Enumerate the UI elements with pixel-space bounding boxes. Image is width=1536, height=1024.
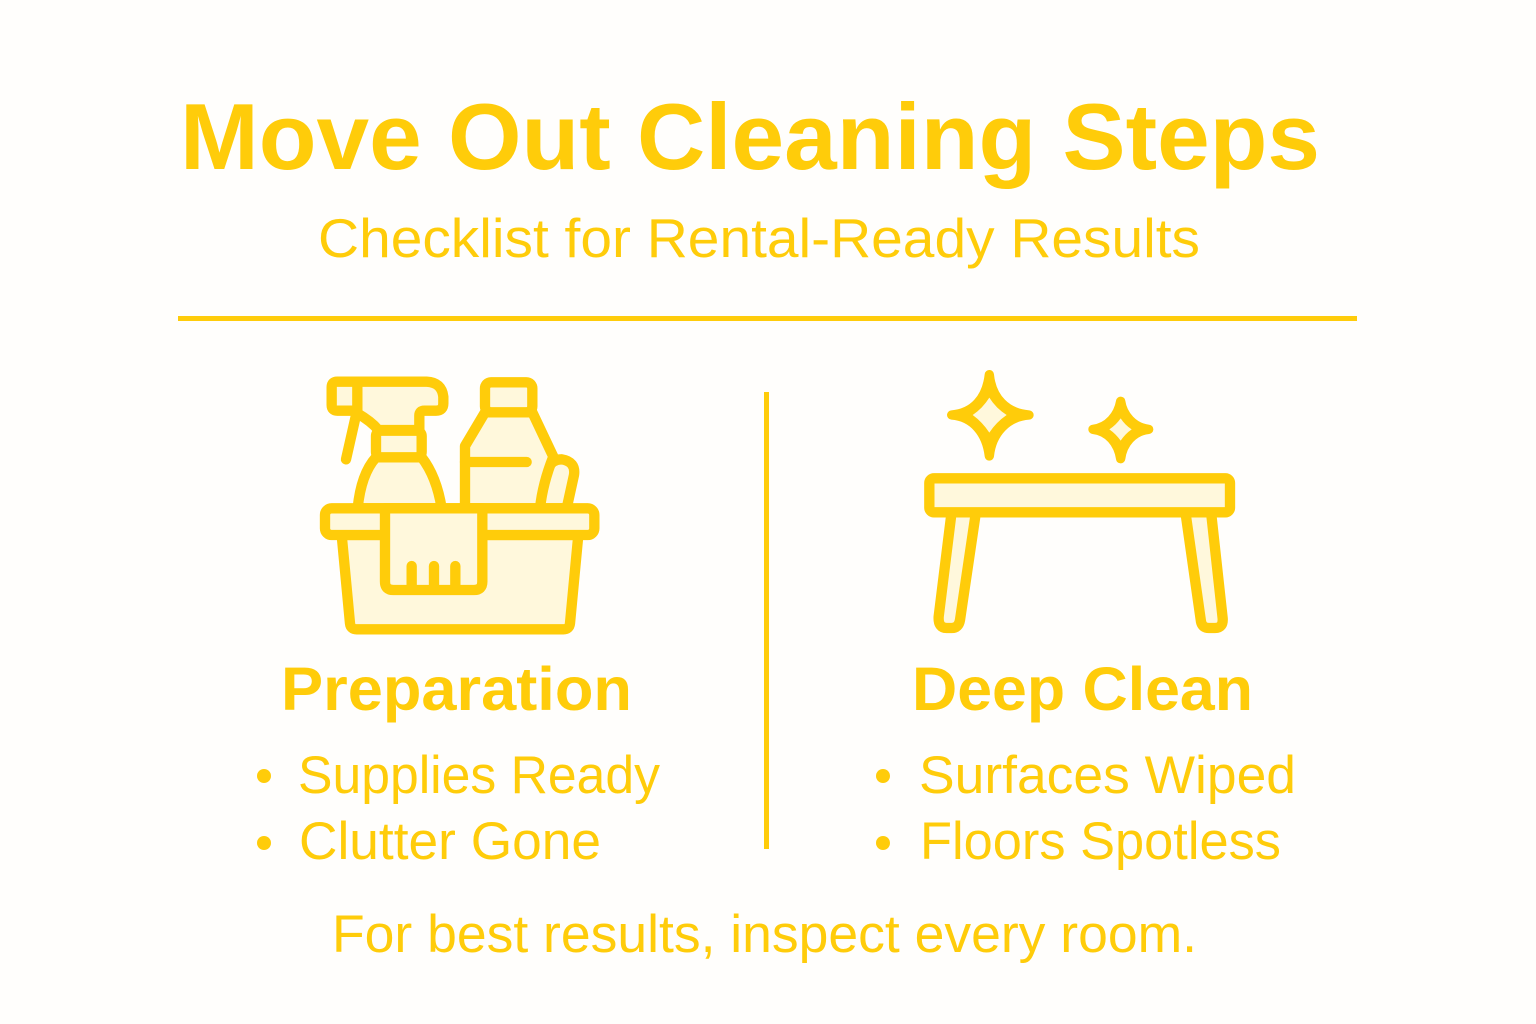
list: deep clean items: Floors Spotless [920, 812, 1281, 871]
icon: shiny table [929, 375, 1230, 628]
detergent bottle [465, 382, 574, 508]
list: preparation items: Supplies Ready [298, 746, 660, 805]
heading: deep clean: Deep Clean [912, 655, 1253, 723]
list: preparation items: Clutter Gone [299, 812, 601, 871]
spray bottle [332, 382, 443, 508]
heading: preparation: Preparation [281, 655, 632, 723]
list: deep clean items [876, 746, 1296, 871]
subtitle: Checklist for Rental-Ready Results [318, 207, 1200, 269]
panel: deep clean [876, 375, 1296, 871]
basket [325, 508, 594, 629]
panel: preparation [257, 382, 660, 871]
title: Move Out Cleaning Steps [180, 84, 1320, 189]
list: preparation items [257, 746, 660, 871]
icon: cleaning supplies basket [325, 382, 594, 629]
table top [929, 478, 1230, 512]
footer note: For best results, inspect every room. [332, 905, 1197, 964]
sparkles [952, 375, 1149, 459]
list: deep clean items: Surfaces Wiped [919, 746, 1296, 805]
table legs [939, 512, 1223, 628]
